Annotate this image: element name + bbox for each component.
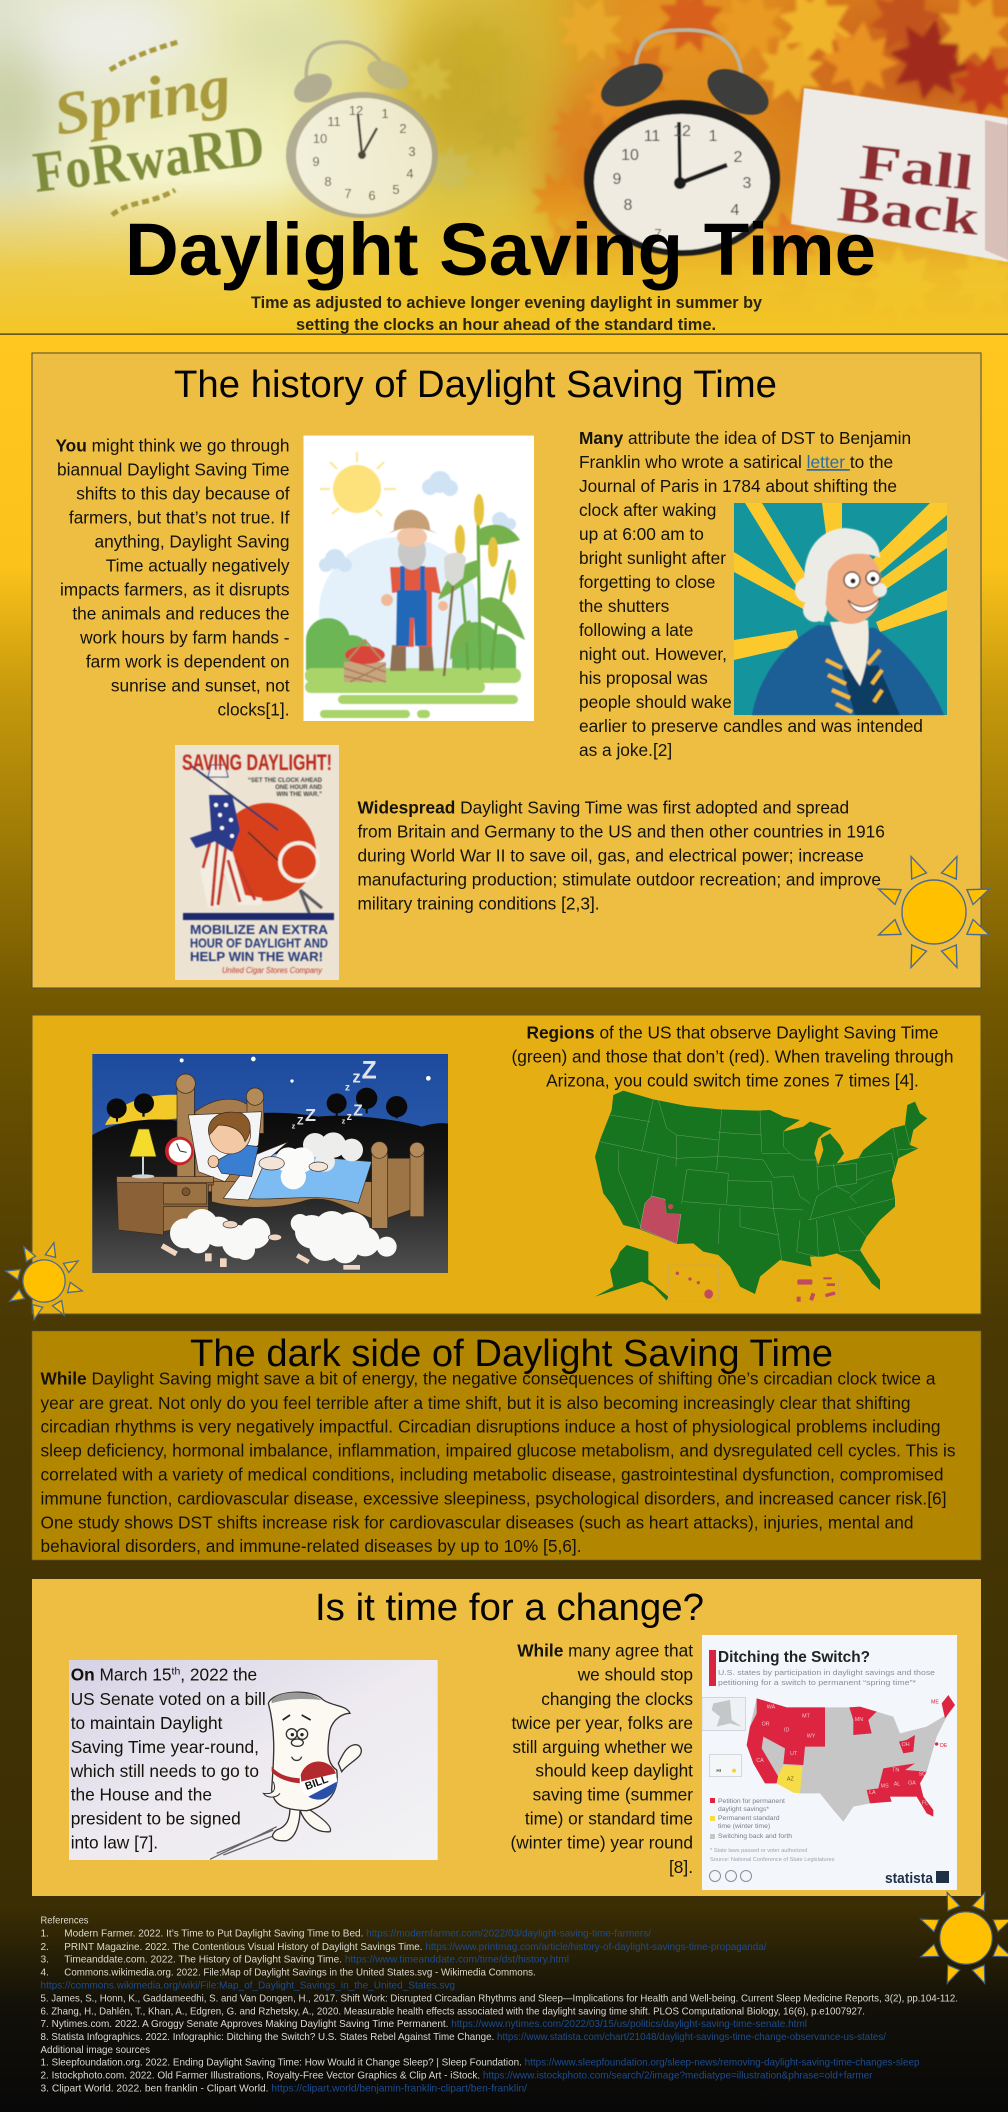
icon: fall clock: 1: [709, 128, 718, 145]
lettering: spring forward: FoRwaRD: [30, 112, 268, 205]
legend: daylight savings*: [718, 1806, 769, 1813]
icon: spring clock: [286, 42, 438, 218]
text: march 15: the House and the: [71, 1784, 212, 1804]
image: saving daylight poster: “SET THE CLOCK AHEAD: [248, 778, 323, 784]
icon: fall clock: [584, 30, 780, 256]
logo: statista: statista: [885, 1870, 934, 1887]
map: petition states: GA: [908, 1780, 916, 1786]
icon: spring clock: 11: [327, 114, 341, 129]
map: united states dst: [595, 1091, 927, 1302]
references: 2. Istockphoto.com. 2022. Old Farmer Illustrations, Royalty-Free Vector Graphics & Clip Art - iStock. https://www.istockphoto.com/search/2/image?mediatype=illustration&phrase=old+farmer: [40, 2071, 873, 2082]
references: 2.: [40, 1942, 49, 1953]
map: petition states: UT: [790, 1751, 798, 1757]
references: 3.: [40, 1955, 49, 1966]
image: farmer: [304, 436, 534, 721]
icon: spring clock: 12: [349, 103, 363, 118]
image: night scene: Z: [297, 1115, 304, 1127]
text: many attribute: bright sunlight after: [579, 548, 726, 568]
text: while many agree: time) or standard time: [525, 1808, 693, 1828]
text: you might think: farmers, but that’s not true. If: [69, 508, 290, 528]
text: many attribute: clock after waking: [579, 500, 716, 520]
map: petition states: SC: [919, 1772, 926, 1778]
map: petition states: MN: [855, 1717, 863, 1723]
text: you might think: shifts to this day because of: [76, 484, 290, 504]
references: 1.: [40, 1929, 49, 1940]
text: dark side body: sleep deficiency, hormonal imbalance, inflammation, impaired glucose metabolism, and dysregulated cell cycles. This is: [40, 1440, 956, 1460]
text: you might think: Time actually negatively: [106, 556, 290, 576]
image: night scene: Z: [305, 1105, 316, 1125]
text: while many agree: still arguing whether we: [512, 1737, 693, 1757]
map: petition states: WA: [767, 1705, 776, 1711]
references: 3. Clipart World. 2022. ben franklin - Clipart World. https://clipart.world/benjamin-franklin-clipart/ben-franklin/: [40, 2084, 527, 2095]
subtitle: setting the clocks an hour ahead of the standard time.: [296, 315, 716, 334]
text: widespread: military training conditions [2,3].: [358, 893, 600, 913]
icon: fall clock: 11: [644, 128, 660, 145]
text: regions: (green) and those that don’t (red). When traveling through: [512, 1047, 953, 1067]
icon: spring clock: 1: [381, 106, 389, 121]
text: march 15: to maintain Daylight: [71, 1713, 223, 1733]
text: many attribute: up at 6:00 am to: [579, 524, 704, 544]
text: many attribute: night out. However,: [579, 644, 727, 664]
icon: fall clock: 9: [613, 171, 622, 188]
legend: Switching back and forth: [718, 1833, 792, 1840]
icon: spring clock: 5: [392, 182, 400, 197]
icon: fall clock: 8: [624, 197, 633, 214]
icon: spring clock: 6: [368, 188, 376, 203]
references: 8. Statista Infographics. 2022. Infographic: Ditching the Switch? U.S. States Rebel Against Time Change. https://www.statista.com/chart/21048/daylight-savings-time-change-observance-us-states/: [40, 2032, 886, 2043]
text: dark side body: One study shows DST shifts increase risk for cardiovascular diseases (such as heart attacks), injuries, mental and: [40, 1512, 914, 1532]
image: night scene: Z: [362, 1057, 377, 1084]
icon: spring clock: 4: [406, 166, 414, 181]
panel: regions: [0, 1015, 981, 1325]
map: petition states: [702, 1695, 955, 1822]
text: many attribute: people should wake: [579, 692, 732, 712]
map: petition states: CA: [756, 1758, 764, 1764]
references: 4.: [40, 1968, 49, 1979]
icon: spring clock: 8: [324, 174, 332, 189]
text: widespread: Widespread Daylight Saving Time was first adopted and spread: [358, 797, 849, 817]
image: night scene: z: [345, 1082, 350, 1093]
map: petition states: WY: [807, 1734, 816, 1740]
text: you might think: work hours by farm hands -: [79, 627, 290, 647]
text: while many agree: we should stop: [577, 1665, 693, 1685]
map: petition states: OH: [902, 1742, 910, 1748]
map: petition states: ID: [784, 1727, 789, 1733]
text: march 15: [70, 1665, 266, 1852]
references: Commons.wikimedia.org. 2022. File:Map of Daylight Savings in the United States.svg - Wikimedia Commons.: [64, 1968, 536, 1979]
text: you might think: sunrise and sunset, not: [111, 675, 290, 695]
chart: statista ditching the switch: petitioning for a switch to permanent “spring time”*: [718, 1678, 916, 1687]
icon: sun small: [0, 1237, 88, 1325]
image: night scene: z: [292, 1121, 296, 1130]
text: while many agree: (winter time) year round: [511, 1832, 693, 1852]
image: saving daylight poster: ONE HOUR AND: [275, 785, 323, 791]
text: you might think: clocks[1].: [217, 699, 290, 719]
map: petition states: TN: [892, 1768, 899, 1774]
references: https://commons.wikimedia.org/wiki/File:Map_of_Daylight_Savings_in_the_United_States.svg: [40, 1980, 455, 1991]
image: benjamin franklin: [734, 503, 947, 715]
image: night scene: z: [347, 1111, 352, 1123]
map: petition states: HI: [716, 1768, 721, 1773]
text: many attribute: following a late: [579, 620, 693, 640]
text: regions: Regions of the US that observe Daylight Saving Time: [526, 1023, 939, 1043]
heading: history: The history of Daylight Saving Time: [174, 364, 777, 406]
panel: dark side: [32, 1331, 981, 1560]
text: many attribute: as a joke.[2]: [579, 740, 672, 760]
references: PRINT Magazine. 2022. The Contentious Visual History of Daylight Savings Time. https://www.printmag.com/article/history-of-daylight-savings-time-propaganda/: [64, 1942, 767, 1953]
heading: change: Is it time for a change?: [315, 1587, 704, 1629]
map: petition states: MT: [802, 1713, 811, 1719]
text: march 15: , 2022 the: [180, 1665, 257, 1685]
text: you might think: anything, Daylight Saving: [94, 532, 290, 552]
text: dark side body: immune function, cardiovascular disease, excessive sleepiness, psychological disorders, and increased cancer risk.[6]: [40, 1488, 946, 1508]
image: night scene: z: [342, 1117, 346, 1126]
image: saving daylight poster: United Cigar Stores Company: [222, 966, 323, 975]
references: 6. Zhang, H., Dahlén, T., Khan, A., Edgren, G. and Rzhetsky, A., 2020. Measurable health effects associated with the daylight saving time shift. PLOS Computational Biology, 16(6), p.e1007927.: [40, 2006, 865, 2017]
image: saving daylight poster: MOBILIZE AN EXTRA: [190, 922, 329, 937]
icon: spring clock: 10: [313, 131, 327, 146]
subtitle: [251, 293, 763, 334]
chart: statista ditching the switch: [702, 1635, 957, 1890]
lettering: spring forward: Spring: [49, 52, 236, 148]
text: many attribute: his proposal was: [579, 668, 708, 688]
image: night scene: z: [352, 1067, 361, 1086]
lettering: spring forward: [30, 42, 268, 215]
map: petition states: LA: [869, 1790, 876, 1796]
icon: fall clock: 10: [621, 147, 639, 164]
source note: [710, 1848, 835, 1863]
icon: fall clock: 12: [673, 123, 691, 140]
icon: spring clock: 3: [408, 144, 416, 159]
icon: sun: [876, 854, 992, 970]
text: dark side body: behavioral disorders, and immune-related diseases by up to 10% [5,6].: [40, 1536, 582, 1556]
image: night scene: Z: [353, 1103, 363, 1120]
text: many attribute: Journal of Paris in 1784 about shifting the: [579, 476, 897, 496]
heading: dark side: The dark side of Daylight Saving Time: [190, 1333, 833, 1375]
card: fall back: [791, 88, 1008, 262]
text: while many agree: saving time (summer: [533, 1784, 693, 1804]
map: petition states: AZ: [787, 1776, 794, 1782]
references: Modern Farmer. 2022. It’s Time to Put Daylight Saving Time to Bed. https://modernfarmer.com/2022/03/daylight-saving-time-farmers/: [64, 1929, 651, 1940]
text: march 15: On March 15: [71, 1665, 172, 1685]
text: you might think: the animals and reduces the: [72, 603, 290, 623]
chart: statista ditching the switch: U.S. states by participation in daylight savings and those: [718, 1668, 935, 1677]
legend: Petition for permanent: [718, 1798, 785, 1805]
text: dark side body: [40, 1369, 956, 1556]
text: march 15: into law [7].: [71, 1832, 158, 1852]
text: you might think: farm work is dependent on: [86, 651, 290, 671]
references: 1. Sleepfoundation.org. 2022. Ending Daylight Saving Time: How Would it Change Sleep? | Sleep Foundation. https://www.sleepfoundation.org/sleep-news/removing-daylight-saving-time-changes-sleep: [40, 2058, 920, 2069]
icon: sun large bottom: [918, 1890, 1008, 1986]
text: while many agree: While many agree that: [517, 1641, 693, 1661]
text: many attribute: forgetting to close: [579, 572, 715, 592]
text: you might think: biannual Daylight Saving Time: [57, 460, 290, 480]
text: while many agree: twice per year, folks are: [511, 1713, 693, 1733]
text: many attribute: [579, 428, 923, 760]
image: bill cartoon: [69, 1660, 438, 1860]
text: march 15: US Senate voted on a bill: [71, 1689, 266, 1709]
image: saving daylight poster: SAVING DAYLIGHT!: [182, 750, 332, 775]
icon: fall clock: 2: [734, 149, 743, 166]
image: bill cartoon: BILL: [304, 1773, 330, 1793]
text: while many agree: changing the clocks: [541, 1689, 693, 1709]
text: dark side body: year are great. Not only do you feel terrible after a time shift, but it is also becoming increasingly clear that shifting: [40, 1393, 910, 1413]
image: saving daylight poster: HOUR OF DAYLIGHT AND: [190, 936, 328, 950]
text: dark side body: correlated with a variety of medical conditions, including metabolic disease, gastrointestinal dysfunction, compromised: [40, 1464, 944, 1484]
card: fall back: Back: [835, 175, 982, 246]
source note: Source: National Conference of State Legislatures: [710, 1857, 835, 1863]
map: petition states: FL: [922, 1800, 928, 1806]
text: you might think: [55, 436, 290, 719]
text: regions: Arizona, you could switch time zones 7 times [4].: [546, 1070, 919, 1090]
text: you might think: You might think we go through: [55, 436, 290, 456]
text: march 15: th: [172, 1666, 180, 1678]
text: march 15: Saving Time year-round,: [71, 1737, 259, 1757]
references: Additional image sources: [40, 2045, 150, 2056]
references: 7. Nytimes.com. 2022. A Groggy Senate Approves Making Daylight Saving Time Permanent. https://www.nytimes.com/2022/03/15/us/politics/daylight-saving-time-senate.html: [40, 2019, 807, 2030]
text: widespread: during World War II to save oil, gas, and electrical power; increase: [358, 845, 864, 865]
icon: spring clock: 2: [399, 121, 407, 136]
text: widespread: from Britain and Germany to the US and then other countries in 1916: [358, 821, 885, 841]
image: night scene: [92, 1054, 448, 1273]
map: petition states: MS: [881, 1784, 889, 1790]
text: widespread: manufacturing production; stimulate outdoor recreation; and improve: [358, 869, 881, 889]
header banner: [0, 0, 1008, 341]
source note: * State laws passed or voter authorized: [710, 1848, 807, 1854]
text: many attribute: Franklin who wrote a satirical letter to the: [579, 452, 893, 472]
references: [40, 1916, 958, 2095]
text: many attribute: earlier to preserve candles and was intended: [579, 716, 923, 736]
references: 5. James, S., Honn, K., Gaddameedhi, S. and Van Dongen, H., 2017. Shift Work: Disrupted Circadian Rhythms and Sleep—Implications for Health and Well-being. Current Sleep Medicine Reports, 3(2), pp.104-112.: [40, 1993, 958, 2004]
card: fall back: Fall: [857, 133, 976, 201]
subtitle: Time as adjusted to achieve longer evening daylight in summer by: [251, 293, 763, 312]
text: march 15: president to be signed: [71, 1808, 241, 1828]
icon: spring clock: 7: [344, 186, 352, 201]
text: many attribute: the shutters: [579, 596, 670, 616]
panel: history: [32, 353, 992, 988]
references: Timeanddate.com. 2022. The History of Daylight Saving Time. https://www.timeanddate.com/time/dst/history.html: [64, 1955, 569, 1966]
image: saving daylight poster: WIN THE WAR.”: [276, 792, 322, 798]
icon: fall clock: 4: [731, 202, 740, 219]
text: widespread: [358, 797, 885, 913]
icon: fall clock: 7: [654, 226, 662, 241]
text: while many agree: [8].: [669, 1857, 693, 1877]
map: petition states: AL: [894, 1781, 900, 1787]
chart: statista ditching the switch: Ditching the Switch?: [718, 1649, 870, 1666]
map: petition states: OR: [762, 1722, 770, 1728]
references: References: [40, 1916, 88, 1926]
map: petition states: DE: [940, 1743, 948, 1749]
legend: [710, 1798, 792, 1840]
icon: spring clock: 9: [312, 154, 320, 169]
text: while many agree: should keep daylight: [535, 1761, 693, 1781]
image: saving daylight poster: [175, 745, 339, 980]
text: you might think: impacts farmers, as it disrupts: [60, 580, 290, 600]
image: saving daylight poster: HELP WIN THE WAR!: [190, 949, 323, 964]
text: march 15: which still needs to go to: [70, 1761, 259, 1781]
map: petition states: ME: [931, 1699, 939, 1705]
title: Daylight Saving Time: [125, 208, 876, 291]
text: dark side body: circadian rhythms is very negatively impactful. Circadian disruptions induce a host of physiological problems including: [40, 1417, 940, 1437]
text: many attribute: Many attribute the idea of DST to Benjamin: [579, 428, 911, 448]
text: while many agree: [511, 1641, 693, 1877]
legend: Permanent standard: [718, 1815, 780, 1822]
text: dark side body: While Daylight Saving might save a bit of energy, the negative consequences of shifting one’s circadian clock twice a: [40, 1369, 936, 1389]
text: regions: [512, 1023, 953, 1090]
legend: time (winter time): [718, 1823, 770, 1830]
icon: fall clock: 3: [743, 175, 752, 192]
panel: change: [32, 1579, 981, 1896]
